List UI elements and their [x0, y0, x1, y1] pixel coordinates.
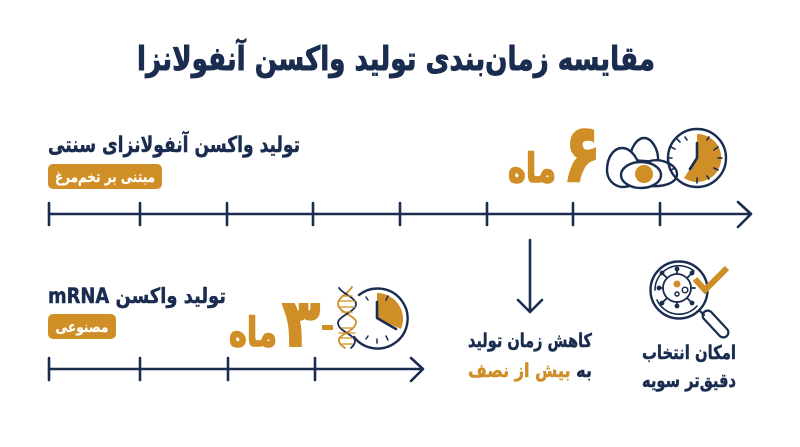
badge: synthetic: مصنوعی	[56, 318, 108, 336]
arrow: down	[518, 240, 542, 312]
duration: six months: ماه	[508, 146, 556, 192]
badge: synthetic	[48, 314, 116, 339]
panel: mRNA production	[48, 284, 423, 381]
duration: six months	[508, 107, 601, 200]
text block: precise strain selection: دقیق‌تر سویه	[642, 370, 736, 392]
heading: traditional: تولید واکسن آنفولانزای سنتی	[48, 130, 300, 158]
title: مقایسه زمان‌بندی تولید واکسن آنفولانزا	[137, 38, 655, 79]
duration: three months	[229, 285, 333, 362]
text block: production time reduced: به بیش از نصف	[468, 360, 592, 382]
duration: three months: ماه	[229, 310, 277, 356]
timeline: three months	[49, 358, 423, 381]
icon: virus under magnifier with check	[650, 262, 730, 339]
icon: eggs	[607, 138, 677, 188]
badge: egg based	[48, 164, 162, 189]
icon: clock three months	[354, 289, 408, 349]
panel: traditional production	[48, 107, 751, 227]
badge: egg based: مبتنی بر تخم‌مرغ	[55, 168, 155, 186]
heading: mRNA: تولید واکسن mRNA	[48, 284, 226, 308]
icon: DNA helix	[338, 287, 356, 348]
text block: production time reduced: کاهش زمان تولید	[468, 330, 593, 352]
duration: six months: ۶	[563, 107, 601, 200]
icon: clock six months	[668, 129, 726, 187]
text block: precise strain selection: امکان انتخاب	[642, 342, 736, 364]
text block: precise strain selection	[642, 342, 736, 392]
duration: three months: ۳	[282, 285, 320, 362]
text block: production time reduced	[468, 330, 593, 382]
timeline: six months	[49, 202, 751, 227]
